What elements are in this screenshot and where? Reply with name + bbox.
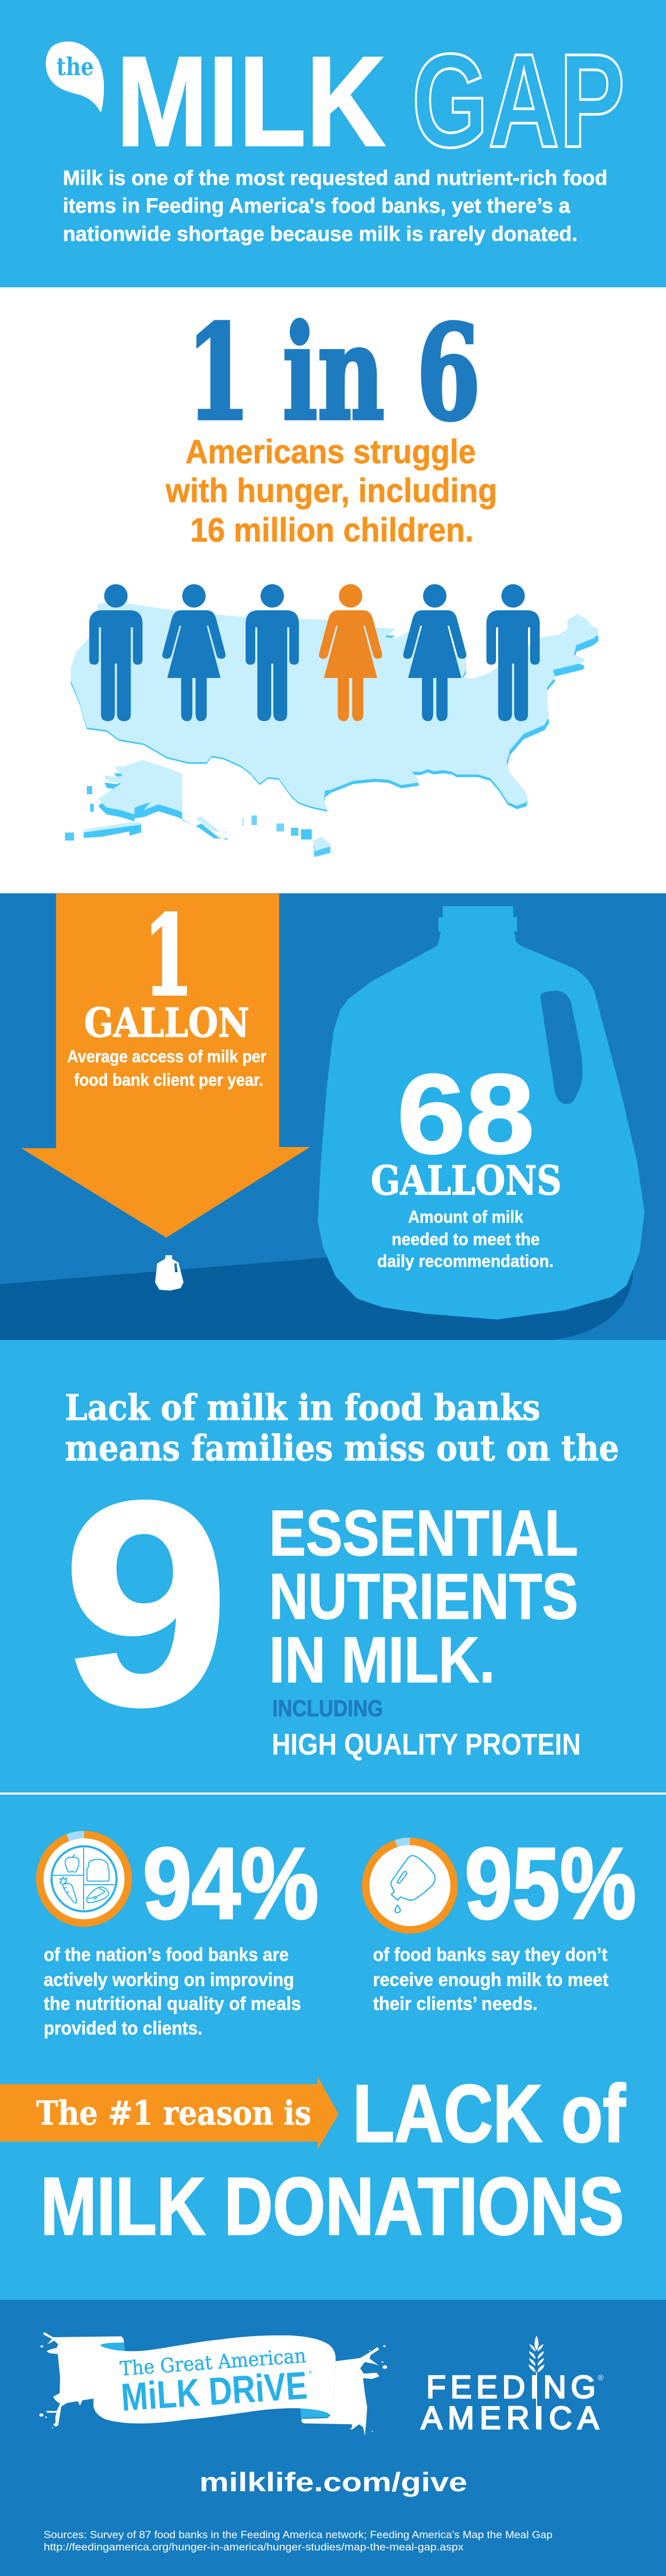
label: high quality protein: HIGH QUALITY PROTEIN [272, 1727, 581, 1762]
caption: 95%: receive enough milk to meet [373, 1969, 608, 1990]
icon: pouring jug donut [354, 1830, 466, 1941]
title: MILK: MILK [116, 30, 386, 173]
arrow: orange down [21, 893, 310, 1238]
sources [44, 2529, 553, 2553]
arrow: number one reason [0, 2076, 339, 2150]
panel: gallons comparison [0, 892, 666, 1340]
headline: 1 in 6: 1 in 6 [186, 296, 481, 449]
caption: 94%: of the nation’s food banks are [44, 1944, 289, 1965]
68 gallons stat: needed to meet the [392, 1230, 540, 1249]
heading: lack of milk: Lack of milk in food banks [65, 1387, 540, 1428]
68 gallons stat: daily recommendation. [377, 1251, 554, 1271]
essential nutrients text [269, 1497, 578, 1696]
icon: speech bubble with the [46, 42, 104, 112]
1 gallon stat: GALLON [84, 999, 249, 1046]
caption: 94%: the nutritional quality of meals [44, 1993, 301, 2014]
68 gallons stat: 68 [397, 1051, 534, 1177]
logo: Great American Milk Drive: MiLK DRiVE [120, 2364, 308, 2419]
intro paragraph: items in Feeding America's food banks, yet there’s a [63, 195, 570, 217]
icon: large milk jug [318, 906, 645, 1320]
sources: Sources: Survey of 87 food banks in the Feeding America network; Feeding America’s Map the Meal Gap [44, 2529, 553, 2541]
caption: 94% [44, 1944, 301, 2039]
68 gallons stat [371, 1051, 562, 1271]
1 gallon stat: Average access of milk per [67, 1047, 266, 1066]
person: woman 2 [163, 584, 225, 721]
heading: lack of milk [65, 1387, 619, 1469]
icon: small milk jug [155, 1255, 183, 1290]
subheading: hunger statistic [165, 433, 497, 549]
caption: 94%: provided to clients. [44, 2018, 202, 2039]
essential nutrients text: IN MILK. [269, 1624, 495, 1696]
logo: Feeding America: AMERICA [421, 2400, 599, 2436]
panel: header [0, 0, 666, 287]
essential nutrients text: ESSENTIAL [269, 1497, 578, 1569]
floor shadow [0, 1257, 633, 1340]
url: milklife.com/give [199, 2467, 467, 2497]
person: man 1 [90, 584, 143, 721]
caption: 95% [373, 1944, 608, 2014]
panel: essential nutrients [0, 1340, 666, 2300]
map: Hawaii [242, 815, 330, 857]
caption: 95%: their clients’ needs. [373, 1993, 538, 2014]
intro paragraph [63, 167, 607, 246]
panel: 1 in 6 [0, 287, 666, 893]
caption: 94%: actively working on improving [44, 1969, 294, 1990]
label: including: INCLUDING [272, 1695, 383, 1722]
1 gallon stat: 1 [144, 892, 193, 1020]
68 gallons stat: GALLONS [371, 1157, 562, 1204]
intro paragraph: nationwide shortage because milk is rarely donated. [63, 223, 578, 246]
sources: http://feedingamerica.org/hunger-in-america/hunger-studies/map-the-meal-gap.aspx [44, 2541, 464, 2553]
subheading: hunger statistic: Americans struggle [185, 433, 476, 471]
person: orange woman [319, 584, 382, 721]
1 gallon stat [67, 892, 266, 1089]
68 gallons stat: Amount of milk [408, 1207, 523, 1226]
logo: Feeding America [421, 2336, 604, 2436]
icon: speech bubble with the: the [56, 52, 94, 81]
logo: Feeding America: FEEDING [426, 2369, 596, 2405]
person: man 6 [486, 584, 540, 721]
arrow: number one reason: The #1 reason is [36, 2094, 311, 2133]
intro paragraph: Milk is one of the most requested and nutrient-rich food [63, 167, 607, 190]
stat: 94 percent [27, 1821, 319, 2039]
person: man 3 [246, 584, 299, 721]
logo: Feeding America: ® [598, 2373, 604, 2383]
map: United States [65, 603, 598, 857]
map: Alaska [65, 760, 228, 841]
panel: footer [0, 2300, 666, 2576]
number: 94%: 94% [143, 1827, 319, 1940]
essential nutrients text: NUTRIENTS [269, 1560, 578, 1633]
icon: plate donut [27, 1821, 141, 1936]
subheading: hunger statistic: with hunger, including [165, 472, 497, 510]
1 gallon stat: food bank client per year. [74, 1070, 263, 1089]
person: woman 5 [403, 584, 466, 721]
subheading: hunger statistic: 16 million children. [190, 512, 474, 549]
heading: lack of milk: means families miss out on the [65, 1427, 619, 1469]
caption: 95%: of food banks say they don’t [373, 1944, 607, 1965]
big number 9: 9 [63, 1442, 229, 1766]
logo: Great American Milk Drive: ® [308, 2370, 312, 2375]
logo: Great American Milk Drive: The Great American [119, 2344, 307, 2380]
divider [0, 1792, 666, 1795]
stat: 95 percent [354, 1827, 636, 2014]
number: 95%: 95% [465, 1827, 636, 1940]
logo: Great American Milk Drive [39, 2332, 387, 2436]
